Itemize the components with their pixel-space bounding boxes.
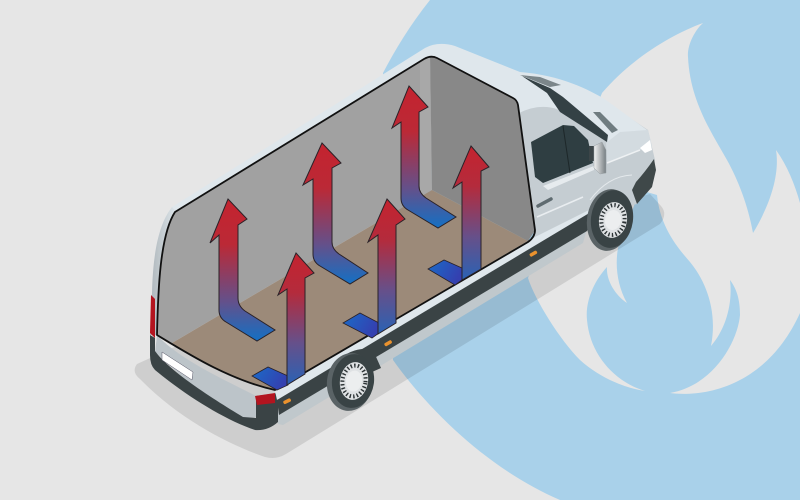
arrow: front left <box>252 253 314 390</box>
cargo outline <box>157 57 535 390</box>
arrow: front right <box>428 146 489 285</box>
flame: inner grey <box>528 23 800 394</box>
front bumper <box>632 159 656 204</box>
rear lamp left <box>150 295 155 338</box>
door crease highlight <box>537 197 583 217</box>
license plate <box>162 352 193 380</box>
rear lamp right <box>255 393 275 405</box>
wiper <box>593 112 618 133</box>
window frame highlight <box>543 166 594 190</box>
van <box>150 44 656 430</box>
rear corner strip <box>420 56 432 197</box>
ground shadow <box>135 194 664 458</box>
roof strip <box>520 75 561 87</box>
side mirror <box>589 142 606 174</box>
arrow: back middle <box>303 143 368 284</box>
rear dark bumper <box>150 335 278 430</box>
headlight <box>640 140 652 153</box>
side window <box>531 125 593 183</box>
flame: outer blue <box>383 0 800 500</box>
arrow: back right <box>392 86 456 228</box>
arrow: front middle <box>343 199 405 338</box>
rear wheel arch <box>335 349 381 400</box>
orange marker lights <box>283 250 538 405</box>
rear wheel <box>323 350 378 414</box>
arrow: back left <box>210 199 275 341</box>
cab body <box>510 72 655 243</box>
hood crease highlight <box>607 150 640 163</box>
lower skirt <box>278 229 587 425</box>
left wall <box>157 56 432 343</box>
side dark band <box>277 209 596 415</box>
cargo floor <box>172 190 528 390</box>
door handle <box>538 199 551 206</box>
side sill light strip <box>275 206 597 400</box>
front wheel <box>583 186 637 254</box>
right wall <box>430 56 535 241</box>
hood <box>606 130 652 163</box>
left rear pillar <box>150 207 177 335</box>
cargo interior <box>157 56 535 390</box>
rear panel <box>155 335 256 418</box>
windshield <box>522 76 608 142</box>
roof <box>152 44 647 295</box>
wheel arch line <box>590 175 632 200</box>
